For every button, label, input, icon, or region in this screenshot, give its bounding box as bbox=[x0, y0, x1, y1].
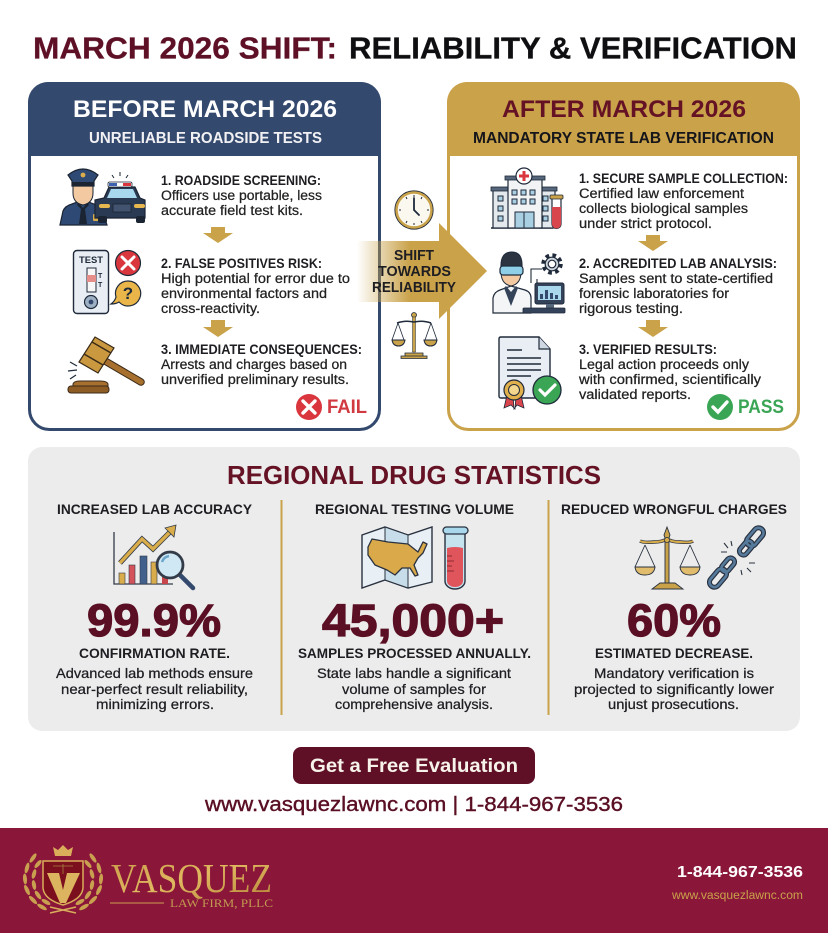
footer band bbox=[0, 828, 828, 933]
before heading: BEFORE MARCH 2026 bbox=[73, 96, 337, 123]
step 2 text: cross-reactivity. bbox=[161, 301, 260, 316]
stat description: projected to significantly lower bbox=[574, 682, 775, 697]
call to action button bbox=[293, 747, 535, 784]
step 1 text: 1. SECURE SAMPLE COLLECTION: bbox=[579, 171, 788, 186]
stat description: Mandatory verification is bbox=[594, 666, 754, 681]
step 3 text: unverified preliminary results. bbox=[161, 372, 349, 387]
stat description: minimizing errors. bbox=[96, 697, 214, 712]
stat description: volume of samples for bbox=[342, 682, 486, 697]
step 2 text: 2. ACCREDITED LAB ANALYSIS: bbox=[579, 256, 777, 271]
icon: test kit with error and question: T bbox=[98, 273, 103, 280]
step 2 text bbox=[161, 256, 350, 316]
step 3 text: validated reports. bbox=[579, 387, 691, 402]
arrow: shift towards reliability bbox=[357, 223, 487, 319]
step 2 text: High potential for error due to bbox=[161, 271, 350, 286]
stat: reduced wrongful charges bbox=[561, 502, 787, 712]
step 1 text: collects biological samples bbox=[579, 201, 748, 216]
stat label: CONFIRMATION RATE. bbox=[79, 646, 230, 661]
step 1 text: under strict protocol. bbox=[579, 216, 712, 231]
step 2 text: forensic laboratories for bbox=[579, 286, 730, 301]
fail badge bbox=[296, 394, 367, 420]
stat description bbox=[574, 666, 775, 712]
stat description: Advanced lab methods ensure bbox=[56, 666, 253, 681]
icon: test kit with error and question: ? bbox=[123, 284, 133, 303]
icon: scales of justice bbox=[392, 312, 437, 358]
step 1 text bbox=[161, 173, 322, 218]
icon: test kit with error and question bbox=[74, 250, 141, 314]
stat: regional testing volume: REGIONAL TESTING VOLUME bbox=[315, 502, 514, 517]
step 3 text: Legal action proceeds only bbox=[579, 357, 749, 372]
step 1 text bbox=[579, 171, 788, 231]
logo: firm name: LAW FIRM, PLLC bbox=[170, 896, 273, 910]
step 1 text: Officers use portable, less bbox=[161, 188, 322, 203]
title: RELIABILITY & VERIFICATION bbox=[349, 30, 797, 66]
stats heading: REGIONAL DRUG STATISTICS bbox=[227, 460, 601, 490]
logo: firm name: VASQUEZ bbox=[111, 855, 272, 901]
footer website: www.vasquezlawnc.com bbox=[671, 890, 803, 902]
title: MARCH 2026 SHIFT: bbox=[33, 30, 337, 66]
step 3 text: 3. IMMEDIATE CONSEQUENCES: bbox=[161, 342, 362, 357]
panel: regional drug statistics bbox=[28, 447, 800, 731]
step 1 text: Certified law enforcement bbox=[579, 186, 744, 201]
title bbox=[33, 30, 797, 66]
icon: hospital with test tube bbox=[491, 168, 563, 228]
stat value: 99.9% bbox=[87, 595, 221, 646]
panel: before March 2026 bbox=[28, 82, 381, 430]
before subheading: UNRELIABLE ROADSIDE TESTS bbox=[89, 130, 322, 147]
call to action button: Get a Free Evaluation bbox=[310, 755, 518, 777]
footer phone: 1-844-967-3536 bbox=[677, 864, 803, 881]
stat value: 60% bbox=[627, 595, 721, 646]
step 1 text: accurate field test kits. bbox=[161, 203, 303, 218]
step 2 text: Samples sent to state-certified bbox=[579, 271, 773, 286]
stat label: ESTIMATED DECREASE. bbox=[595, 646, 753, 661]
step 3 text bbox=[578, 342, 761, 402]
step 2 text: 2. FALSE POSITIVES RISK: bbox=[161, 256, 322, 271]
icon: test kit with error and question: T bbox=[98, 282, 103, 289]
step 2 text: environmental factors and bbox=[161, 286, 327, 301]
stat: increased lab accuracy bbox=[56, 502, 253, 712]
stat: increased lab accuracy: INCREASED LAB ACCURACY bbox=[57, 502, 252, 517]
step 2 text: rigorous testing. bbox=[579, 301, 683, 316]
icon: clock bbox=[395, 191, 433, 229]
icon: test kit with error and question: TEST bbox=[79, 255, 104, 265]
contact line: www.vasquezlawnc.com | 1-844-967-3536 bbox=[204, 793, 623, 816]
icon: certified document bbox=[499, 337, 561, 409]
stat: regional testing volume bbox=[298, 502, 531, 712]
arrow: shift towards reliability: RELIABILITY bbox=[372, 280, 456, 296]
icon: police officer and car bbox=[60, 169, 145, 225]
icon: lab scientist with computer bbox=[493, 252, 565, 313]
stat description bbox=[317, 666, 511, 712]
stat description: State labs handle a significant bbox=[317, 666, 511, 681]
step 3 text: 3. VERIFIED RESULTS: bbox=[579, 342, 717, 357]
logo: Vasquez crest bbox=[23, 845, 103, 913]
arrow: step 2 to 3 bbox=[638, 320, 668, 337]
icon: gavel bbox=[68, 337, 141, 393]
stat description: unjust prosecutions. bbox=[608, 697, 739, 712]
stat value: 45,000+ bbox=[322, 595, 504, 646]
fail badge: FAIL bbox=[327, 397, 367, 418]
step 3 text bbox=[161, 342, 362, 387]
icon: chart and magnifier bbox=[114, 525, 193, 588]
pass badge bbox=[707, 394, 784, 420]
pass badge: PASS bbox=[738, 397, 784, 418]
step 1 text: 1. ROADSIDE SCREENING: bbox=[161, 173, 321, 188]
stat description: comprehensive analysis. bbox=[335, 697, 493, 712]
stat description: near-perfect result reliability, bbox=[61, 682, 248, 697]
arrow: shift towards reliability: TOWARDS bbox=[378, 264, 451, 280]
after subheading: MANDATORY STATE LAB VERIFICATION bbox=[473, 130, 774, 147]
step 3 text: Arrests and charges based on bbox=[161, 357, 347, 372]
icon: scales and broken chain bbox=[635, 526, 766, 589]
icon: US map and test tube bbox=[362, 527, 468, 589]
stat description bbox=[56, 666, 253, 712]
arrow: step 1 to 2 bbox=[638, 235, 668, 251]
after heading: AFTER MARCH 2026 bbox=[502, 96, 746, 123]
arrow: shift towards reliability: SHIFT bbox=[394, 248, 434, 264]
arrow: step 1 to 2 bbox=[203, 227, 233, 243]
panel: after March 2026 bbox=[447, 82, 800, 430]
stat: reduced wrongful charges: REDUCED WRONGFUL CHARGES bbox=[561, 502, 787, 517]
arrow: step 2 to 3 bbox=[203, 320, 233, 337]
step 2 text bbox=[579, 256, 777, 316]
stat label: SAMPLES PROCESSED ANNUALLY. bbox=[298, 646, 531, 661]
step 3 text: with confirmed, scientifically bbox=[578, 372, 761, 387]
